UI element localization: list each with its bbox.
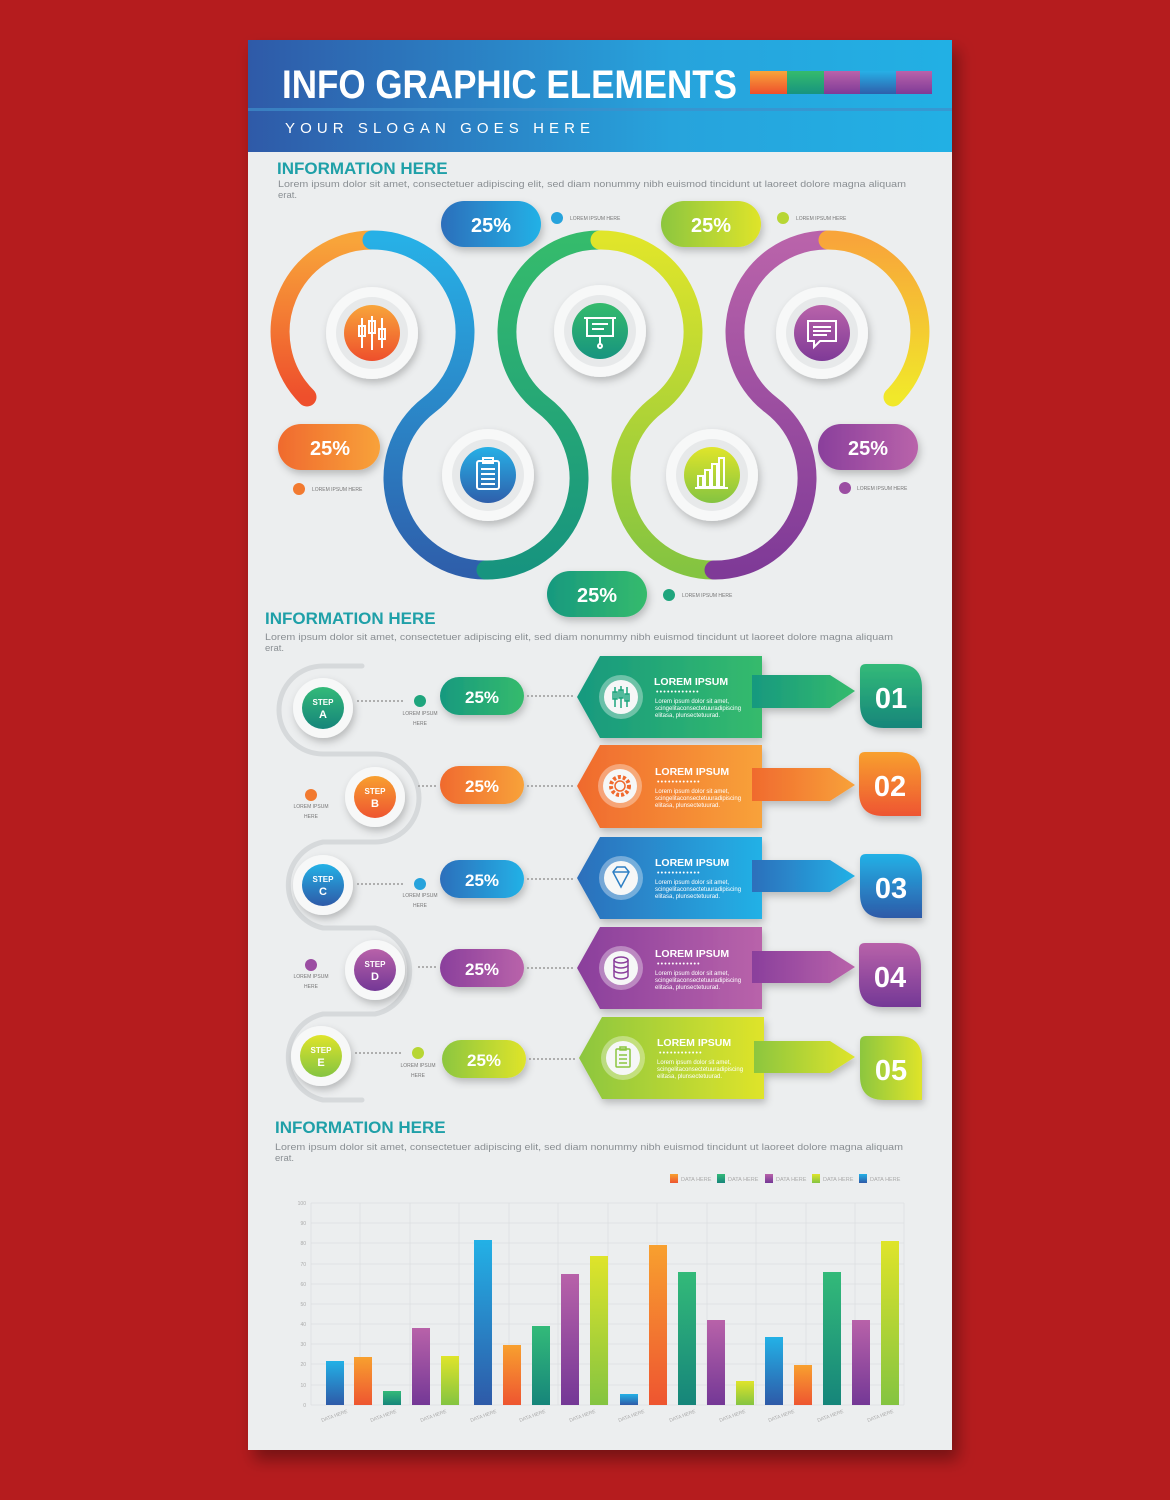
card A: LOREM IPSUM: [654, 676, 728, 688]
pill: left orange 25%: [278, 424, 380, 470]
bar chart: DATA HERE: [719, 1409, 747, 1424]
bar chart: 60: [300, 1282, 306, 1288]
icon: lower left clipboard: [442, 429, 534, 521]
row D: [293, 927, 921, 1009]
bar chart: 30: [300, 1342, 306, 1348]
bar chart: DATA HERE: [370, 1409, 398, 1424]
card A: Lorem ipsum dolor sit amet,: [655, 699, 729, 705]
card B: [577, 745, 855, 828]
number 03: [860, 854, 922, 918]
pill: top yellowgreen 25%: 25%: [691, 215, 731, 237]
row E: LOREM IPSUM: [400, 1063, 436, 1069]
card B: ••••••••••••: [657, 779, 701, 786]
bar chart: DATA HERE: [817, 1409, 845, 1424]
step A circle: STEP: [313, 698, 334, 707]
card A: ••••••••••••: [656, 689, 700, 696]
slogan: YOUR SLOGAN GOES HERE: [285, 120, 595, 137]
number 03: 03: [875, 873, 907, 905]
bar chart: DATA HERE: [669, 1409, 697, 1424]
row B: [293, 745, 921, 828]
step B circle: B: [371, 798, 379, 810]
bar chart: 0: [303, 1403, 306, 1409]
wave chart: [280, 240, 920, 570]
card C: ••••••••••••: [657, 870, 701, 877]
bar chart: 20: [300, 1362, 306, 1368]
pill: top blue 25%: 25%: [471, 215, 511, 237]
number 05: [860, 1036, 922, 1100]
row C: HERE: [413, 903, 428, 909]
card C: elitasa, plunsectetuurad.: [655, 894, 720, 900]
color swatches: [750, 71, 932, 94]
section 1 heading: [277, 159, 906, 201]
step D circle: STEP: [365, 960, 386, 969]
step E circle: [291, 1026, 351, 1086]
row C: LOREM IPSUM: [402, 893, 438, 899]
pill: bottom teal 25%: 25%: [577, 585, 617, 607]
pill: top blue 25%: [441, 201, 541, 247]
label: top blue: [551, 212, 621, 224]
number 02: [859, 752, 921, 816]
bar chart: DATA HERE: [569, 1409, 597, 1424]
section 3 heading: [275, 1118, 903, 1164]
card C: scingelitaconsectetuuradipiscing: [655, 887, 741, 893]
label: left orange: [293, 483, 363, 495]
card E: Lorem ipsum dolor sit amet,: [657, 1060, 731, 1066]
icon: upper right chat: [776, 287, 868, 379]
card E: scingelitaconsectetuuradipiscing: [657, 1067, 743, 1073]
row E: HERE: [411, 1073, 426, 1079]
step B circle: STEP: [365, 787, 386, 796]
legend: DATA HERE: [823, 1177, 854, 1183]
pill E: 25%: [467, 1051, 501, 1070]
section 3 heading: INFORMATION HERE: [275, 1118, 446, 1137]
bar chart: 80: [300, 1241, 306, 1247]
pill: left orange 25%: 25%: [310, 438, 350, 460]
label: right purple: LOREM IPSUM HERE: [857, 486, 908, 492]
step C circle: C: [319, 886, 327, 898]
step B circle: [345, 767, 405, 827]
card A: [577, 656, 855, 738]
card D: [577, 927, 855, 1009]
step E circle: E: [317, 1057, 325, 1069]
pill E: [442, 1040, 526, 1078]
label: bottom teal: [663, 589, 733, 601]
step track: [279, 666, 419, 1100]
pill: right purple 25%: [818, 424, 918, 470]
label: bottom teal: LOREM IPSUM HERE: [682, 593, 733, 599]
bar chart: 40: [300, 1322, 306, 1328]
pill D: [440, 949, 524, 987]
section 2 heading: [265, 609, 893, 654]
step E circle: STEP: [311, 1046, 332, 1055]
card E: LOREM IPSUM: [657, 1037, 731, 1049]
pill A: 25%: [465, 688, 499, 707]
bar chart: DATA HERE: [618, 1409, 646, 1424]
row D: HERE: [304, 984, 319, 990]
section 2 heading: Lorem ipsum dolor sit amet, consectetuer adipiscing elit, sed diam nonummy nibh euismod tincidunt ut laoreet dolore magna aliquam: [265, 632, 893, 643]
number 02: 02: [874, 771, 906, 803]
legend: DATA HERE: [728, 1177, 759, 1183]
card A: scingelitaconsectetuuradipiscing: [655, 706, 741, 712]
bar chart: 10: [300, 1383, 306, 1389]
label: top yellowgreen: [777, 212, 847, 224]
section 3 heading: Lorem ipsum dolor sit amet, consectetuer adipiscing elit, sed diam nonummy nibh euismod tincidunt ut laoreet dolore magna aliquam: [275, 1142, 903, 1153]
pill D: 25%: [465, 960, 499, 979]
bar chart: [298, 1201, 904, 1424]
row B: LOREM IPSUM: [293, 804, 329, 810]
pill C: 25%: [465, 871, 499, 890]
row B: HERE: [304, 814, 319, 820]
section 2 heading: erat.: [265, 643, 284, 654]
section 1 heading: erat.: [278, 190, 297, 201]
number 01: 01: [875, 683, 907, 715]
legend: DATA HERE: [776, 1177, 807, 1183]
section 1 heading: Lorem ipsum dolor sit amet, consectetuer adipiscing elit, sed diam nonummy nibh euismod tincidunt ut laoreet dolore magna aliquam: [278, 179, 906, 190]
bar chart: DATA HERE: [519, 1409, 547, 1424]
row A: LOREM IPSUM: [402, 711, 438, 717]
card D: Lorem ipsum dolor sit amet,: [655, 971, 729, 977]
label: top yellowgreen: LOREM IPSUM HERE: [796, 216, 847, 222]
legend: DATA HERE: [870, 1177, 901, 1183]
card E: [579, 1017, 855, 1099]
legend: [670, 1174, 901, 1183]
bar chart: DATA HERE: [470, 1409, 498, 1424]
section 2 heading: INFORMATION HERE: [265, 609, 436, 628]
bar chart: DATA HERE: [867, 1409, 895, 1424]
icon: middle presentation: [554, 285, 646, 377]
pill C: [440, 860, 524, 898]
card E: ••••••••••••: [659, 1050, 703, 1057]
row D: LOREM IPSUM: [293, 974, 329, 980]
number 01: [860, 664, 922, 728]
number 04: [859, 943, 921, 1007]
card A: elitasa, plunsectetuurad.: [655, 713, 720, 719]
card C: [577, 837, 855, 919]
row A: HERE: [413, 721, 428, 727]
label: right purple: [839, 482, 908, 494]
pill B: [440, 766, 524, 804]
card B: elitasa, plunsectetuurad.: [655, 803, 720, 809]
label: left orange: LOREM IPSUM HERE: [312, 487, 363, 493]
bar chart: 70: [300, 1262, 306, 1268]
bar chart: 50: [300, 1302, 306, 1308]
step D circle: D: [371, 971, 379, 983]
step C circle: [293, 855, 353, 915]
step A circle: A: [319, 709, 327, 721]
card D: LOREM IPSUM: [655, 948, 729, 960]
icon: upper left chart: [326, 287, 418, 379]
card B: scingelitaconsectetuuradipiscing: [655, 796, 741, 802]
page panel: [248, 40, 952, 1450]
bar chart: 100: [298, 1201, 306, 1207]
step A circle: [293, 678, 353, 738]
bar chart: DATA HERE: [321, 1409, 349, 1424]
card C: LOREM IPSUM: [655, 857, 729, 869]
icon: lower right bar chart: [666, 429, 758, 521]
card D: ••••••••••••: [657, 961, 701, 968]
card E: elitasa, plunsectetuurad.: [657, 1074, 722, 1080]
pill: right purple 25%: 25%: [848, 438, 888, 460]
bar chart: DATA HERE: [420, 1409, 448, 1424]
bar chart: 90: [300, 1221, 306, 1227]
card D: scingelitaconsectetuuradipiscing: [655, 978, 741, 984]
pill B: 25%: [465, 777, 499, 796]
row E: [291, 1017, 922, 1100]
step D circle: [345, 940, 405, 1000]
pill: bottom teal 25%: [547, 571, 647, 617]
step C circle: STEP: [313, 875, 334, 884]
number 05: 05: [875, 1055, 907, 1087]
card B: LOREM IPSUM: [655, 766, 729, 778]
number 04: 04: [874, 962, 906, 994]
pill: top yellowgreen 25%: [661, 201, 761, 247]
section 3 heading: erat.: [275, 1153, 294, 1164]
card B: Lorem ipsum dolor sit amet,: [655, 789, 729, 795]
row C: [293, 837, 922, 919]
section 1 heading: INFORMATION HERE: [277, 159, 448, 178]
title: INFO GRAPHIC ELEMENTS: [282, 63, 737, 107]
pill A: [440, 677, 524, 715]
header: [248, 40, 952, 152]
legend: DATA HERE: [681, 1177, 712, 1183]
card D: elitasa, plunsectetuurad.: [655, 985, 720, 991]
row A: [293, 656, 922, 738]
card C: Lorem ipsum dolor sit amet,: [655, 880, 729, 886]
label: top blue: LOREM IPSUM HERE: [570, 216, 621, 222]
bar chart: DATA HERE: [768, 1409, 796, 1424]
